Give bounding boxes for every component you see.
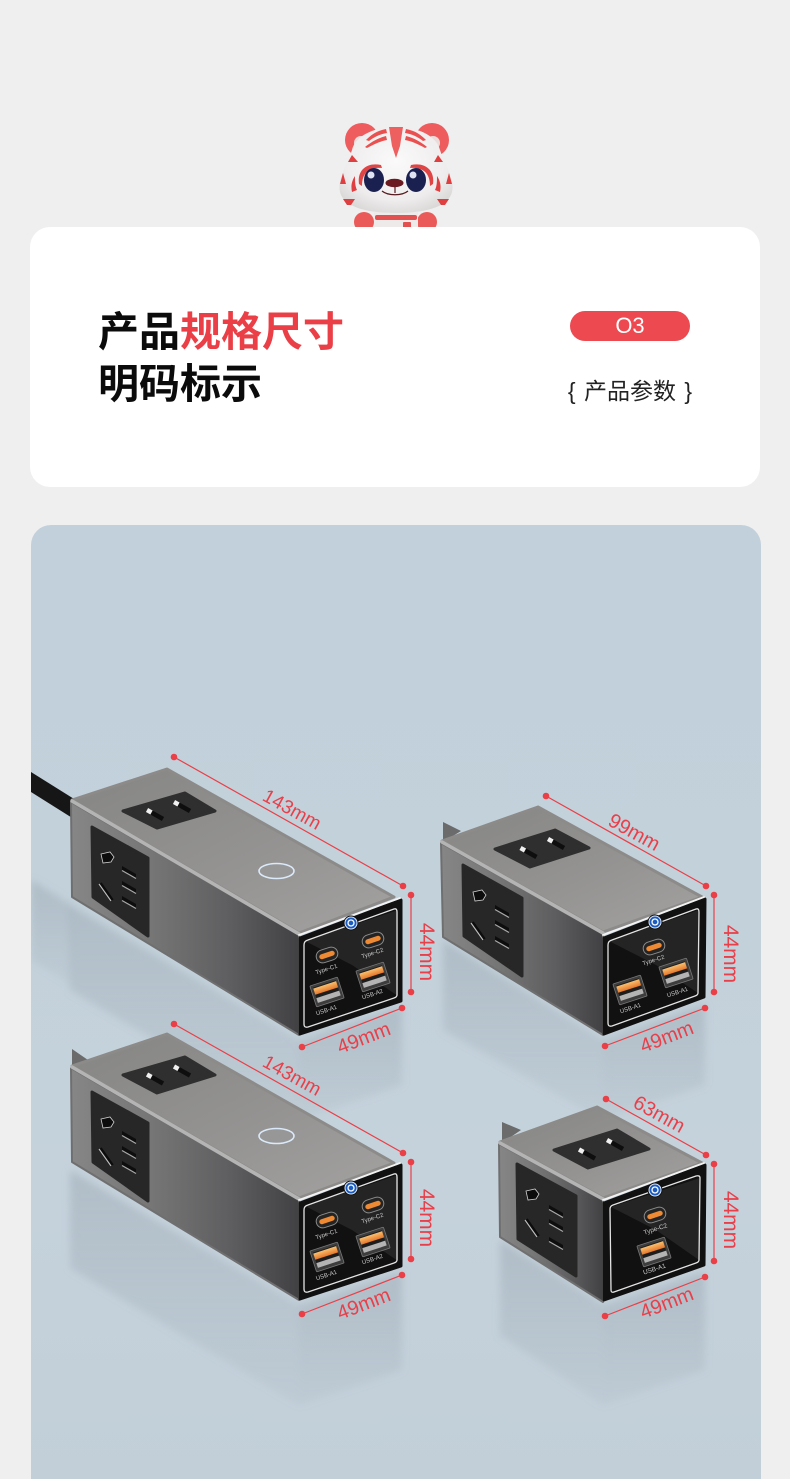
badge: section number: O3 xyxy=(615,313,645,338)
USB front panel: USB-A1 xyxy=(642,1262,667,1277)
heading: 产品规格尺寸 xyxy=(98,309,344,355)
dimensions xyxy=(171,754,438,1059)
dimensions: 44mm xyxy=(415,1189,438,1247)
dimensions xyxy=(602,1092,742,1324)
USB front panel: Type-C2 xyxy=(642,954,666,967)
USB front panel: USB-A1 xyxy=(315,1005,339,1017)
heading xyxy=(98,309,344,407)
USB front panel: USB-A2 xyxy=(361,1254,385,1266)
power cable xyxy=(31,772,73,817)
device: 143mm with plug xyxy=(71,1021,438,1325)
USB front panel: Type-C1 xyxy=(315,963,339,976)
side outlet xyxy=(517,1164,576,1276)
panel: product dimensions xyxy=(31,525,761,1479)
USB front panel: Type-C2 xyxy=(361,947,385,960)
plug blade xyxy=(72,1049,88,1069)
USB front panel: Type-C1 xyxy=(315,1228,339,1241)
dimensions: 143mm xyxy=(259,786,324,835)
top outlet xyxy=(123,1057,215,1093)
top outlet xyxy=(495,830,589,867)
dimensions: 49mm xyxy=(334,1284,394,1325)
device: 63mm xyxy=(499,1092,742,1324)
side outlet xyxy=(92,827,148,936)
dimensions xyxy=(543,793,742,1058)
USB front panel: Type-C2 xyxy=(643,1222,669,1237)
device: 99mm xyxy=(441,793,742,1058)
USB front panel: USB-A1 xyxy=(619,1003,643,1015)
mascot: tiger xyxy=(340,123,452,227)
reflections on floor xyxy=(31,880,705,1405)
touch button xyxy=(259,864,294,878)
plug blade xyxy=(443,822,461,842)
touch button xyxy=(259,1128,294,1144)
plug blade xyxy=(502,1122,521,1143)
heading: 明码标示 xyxy=(98,361,262,407)
subtitle: product parameters: { 产品参数 } xyxy=(568,378,692,404)
device: 143mm with cable xyxy=(15,754,438,1059)
badge: section number xyxy=(570,311,690,341)
USB front panel: Type-C2 xyxy=(361,1212,385,1225)
dimensions: 44mm xyxy=(415,923,438,981)
top outlet xyxy=(123,793,215,828)
USB front panel xyxy=(299,898,401,1034)
dimensions: 49mm xyxy=(637,1017,697,1058)
side outlet xyxy=(463,865,522,976)
dimensions: 49mm xyxy=(334,1018,394,1059)
dimensions: 99mm xyxy=(604,810,664,856)
USB front panel xyxy=(603,897,705,1034)
dimensions: 44mm xyxy=(719,925,742,983)
USB front panel: USB-A2 xyxy=(361,989,385,1001)
top outlet xyxy=(554,1130,649,1168)
dimensions: 143mm xyxy=(259,1052,324,1101)
dimensions: 63mm xyxy=(629,1092,689,1138)
chart: four dimensioned devices xyxy=(31,754,738,1381)
side outlet xyxy=(92,1092,148,1201)
dimensions xyxy=(171,1021,438,1325)
dimensions: 44mm xyxy=(719,1191,742,1249)
USB front panel xyxy=(603,1163,705,1300)
panel: title card xyxy=(30,227,760,487)
USB front panel: USB-A1 xyxy=(666,987,690,999)
dimensions: 49mm xyxy=(637,1283,697,1324)
USB front panel: USB-A1 xyxy=(315,1270,339,1282)
USB front panel xyxy=(299,1163,401,1299)
